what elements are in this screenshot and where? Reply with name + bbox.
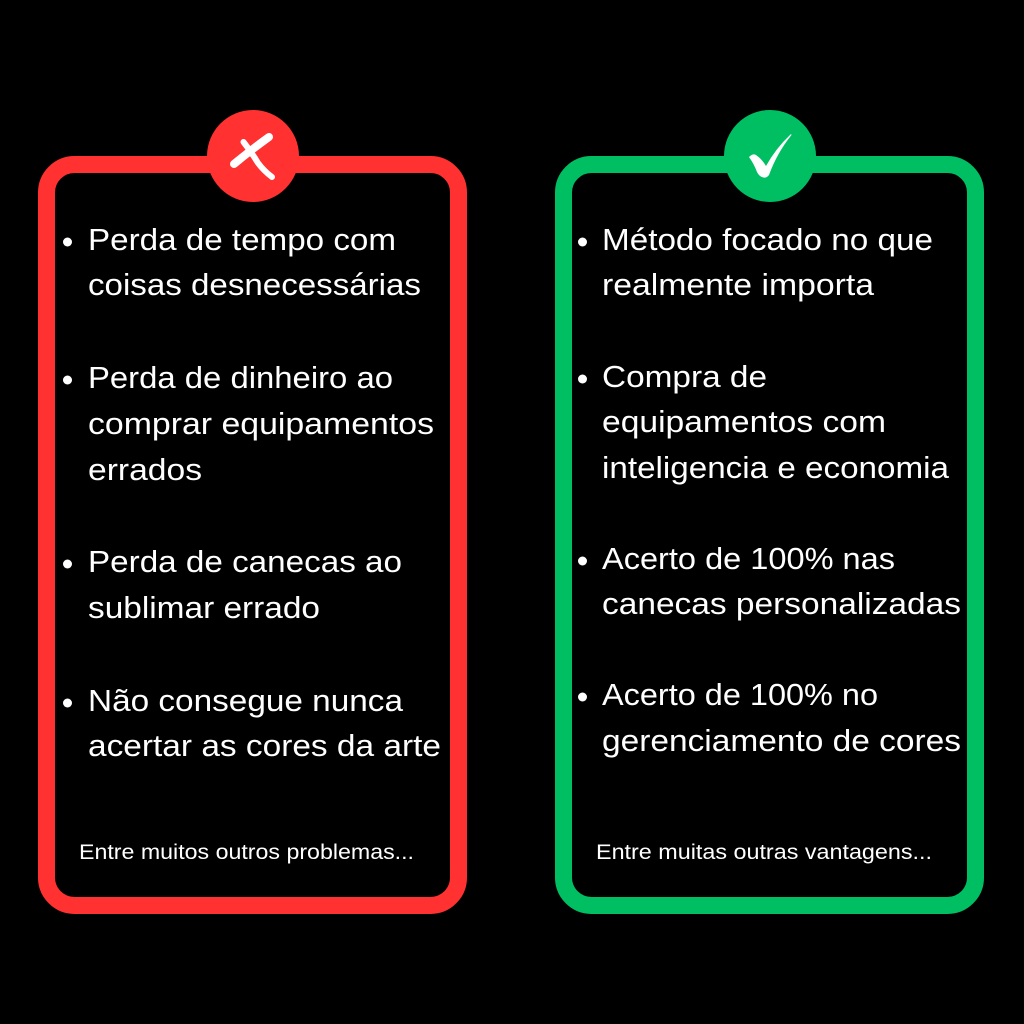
item: compra: Compra de [602,359,767,394]
footnote: problems: Entre muitos outros problemas... [79,841,414,864]
item: cores: acertar as cores da arte [88,728,441,763]
item: dinheiro [63,360,434,487]
icon: red cross badge [207,110,299,202]
item: canecas: Acerto de 100% nas [602,541,895,576]
list: advantages [578,222,961,758]
item: método [578,222,933,302]
footnote: advantages: Entre muitas outras vantagens... [596,841,932,864]
item: canecas: canecas personalizadas [602,586,961,621]
item: tempo: Perda de tempo com [88,222,396,257]
icon: green check badge [724,110,816,202]
list: problems [63,222,441,763]
item: dinheiro: comprar equipamentos [88,406,434,441]
item: canecas [63,544,402,625]
item: dinheiro: Perda de dinheiro ao [88,360,393,395]
item: compra [578,359,950,485]
item: canecas [578,541,961,621]
item: compra: equipamentos com [602,404,886,439]
item: tempo: coisas desnecessárias [88,267,421,302]
item: gerenciamento: Acerto de 100% no [602,677,878,712]
item: canecas: sublimar errado [88,590,320,625]
panel: advantages [564,164,976,906]
item: gerenciamento [578,677,961,758]
item: canecas: Perda de canecas ao [88,544,402,579]
item: dinheiro: errados [88,452,202,487]
item: método: Método focado no que [602,222,933,257]
item: compra: inteligencia e economia [602,450,950,485]
panel: problems [46,164,458,906]
item: cores [63,683,441,763]
item: método: realmente importa [602,267,875,302]
item: cores: Não consegue nunca [88,683,404,718]
item: gerenciamento: gerenciamento de cores [602,723,961,758]
item: tempo [63,222,421,302]
